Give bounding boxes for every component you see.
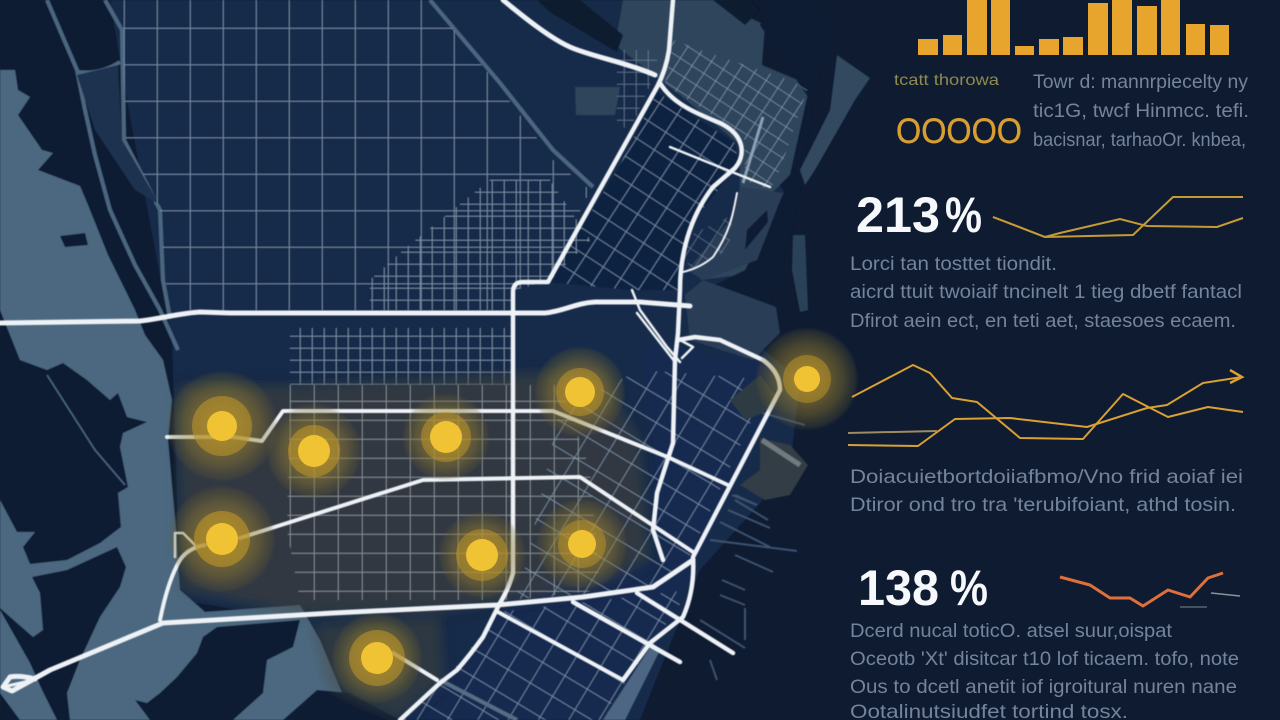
stat value 213%: % [945, 187, 982, 243]
hotspot 7 [438, 511, 526, 599]
highway: east-west upper [0, 302, 690, 323]
map: south east district [400, 340, 782, 720]
map: bottom island [135, 620, 300, 720]
map: piers [700, 405, 805, 680]
map: east ghost shapes [730, 375, 775, 420]
counter value: OOOOO [896, 112, 1022, 151]
hotspot 9 [331, 612, 423, 704]
map: island pond [60, 233, 88, 247]
highway: grey arterial [743, 117, 763, 183]
map: bottom landmass [283, 690, 400, 720]
map: shoreline road [47, 0, 593, 350]
highway: short crossing [670, 147, 770, 187]
text block: 138% description: Dcerd nucal toticO. atsel suur,oispat [850, 620, 1173, 642]
map: north west neighbourhood grid [617, 50, 660, 130]
highway: north-south central [400, 0, 673, 720]
map: fine street grid north [290, 180, 590, 385]
stat value 138%: 138 [858, 560, 939, 616]
map: downtown grid [548, 92, 738, 290]
highway: interchange ramps [632, 290, 693, 362]
map: mid-harbour grid [680, 215, 733, 270]
hotspot 1 [166, 370, 278, 482]
stat value 213%: 213 [856, 187, 940, 243]
map: south east grid [500, 370, 770, 600]
map: dark pier block [745, 210, 768, 250]
text block: top description: bacisnar, tarhaoOr. knbea, [1033, 129, 1246, 151]
map: harbour water [615, 0, 810, 280]
map: haze over city centre [178, 372, 650, 615]
stat value 138% [858, 560, 988, 616]
highway: west triangle ramp [175, 533, 197, 557]
highway: eastern curve [653, 83, 742, 560]
highway: row two [167, 411, 730, 486]
hotspot 4 [534, 346, 626, 438]
map: south district grid [400, 590, 690, 720]
map: dark patch harbour [713, 0, 760, 25]
map: coarse street grid [123, 0, 590, 310]
highway: row four with loop [3, 560, 693, 691]
bar chart [918, 0, 1229, 55]
text block: 138% description: Ous to dcetl anetit iof igroitural nuren nane [850, 676, 1237, 698]
map: lower road [440, 680, 517, 720]
text block: 213% description: Lorci tan tosttet tiondit. [850, 253, 1057, 275]
highway: south row two [573, 602, 680, 662]
map: light water [0, 70, 350, 720]
text block: middle description: Doiacuietbortdoiiafbmo/Vno frid aoiaf iei [850, 466, 1243, 488]
map: island north [0, 310, 147, 564]
text block: 213% description: Dfirot aein ect, en teti aet, staesoes ecaem. [850, 310, 1236, 332]
map: island south [0, 547, 126, 720]
text block: 138% description [850, 620, 1239, 720]
highways [0, 0, 780, 720]
text block: 213% description [850, 253, 1242, 332]
text block: top description: tic1G, twcf Hinmcc. tefi. [1033, 100, 1249, 122]
text block: middle description [850, 466, 1243, 516]
map: harbour patch lower [685, 280, 780, 360]
stat value 138%: % [950, 560, 988, 616]
map: harbour patch south [687, 187, 783, 280]
text block: middle description: Dtiror ond tro tra 'terubifoiant, athd tosin. [850, 494, 1236, 516]
hotspot 8 [536, 498, 628, 590]
map: east shore band [700, 0, 827, 350]
map: strait [32, 540, 117, 570]
map: ghost highlight [762, 440, 800, 465]
text block: 138% description: Oceotb 'Xt' disitcar t10 lof ticaem. tofo, note [850, 648, 1239, 670]
line chart: middle trend with arrow [848, 365, 1243, 446]
map: east strip [792, 235, 808, 312]
map [0, 0, 870, 720]
map: dark patch north [537, 0, 623, 52]
highway: loop return [3, 670, 50, 687]
highway: east ring [623, 337, 780, 680]
map: land base [110, 0, 800, 720]
map: east promontory [800, 55, 870, 185]
hotspot 3 [402, 393, 490, 481]
map: lower strip [603, 643, 660, 720]
map: island centre line [47, 375, 125, 485]
counter label: tcatt thorowa [894, 72, 999, 89]
map: central street grid [287, 385, 600, 600]
hotspot 5 [755, 327, 859, 431]
line chart: 213% trend [993, 197, 1243, 237]
hotspot 6 [168, 485, 276, 593]
hotspots [166, 327, 859, 704]
map: corner landmass [0, 693, 20, 720]
map: downtown district [548, 92, 738, 290]
highway: south spur [393, 653, 437, 680]
map: north coast shape [77, 65, 160, 205]
map: east ghost shape lower [740, 438, 808, 500]
highway: row three [240, 477, 693, 552]
text block: top description [1033, 71, 1249, 151]
map: north east neighbourhood grid [665, 40, 807, 190]
line chart: 138% trend [1060, 573, 1240, 607]
hotspot 2 [266, 403, 362, 499]
highway: south row one [498, 612, 623, 680]
highway: eastern thin branch [683, 193, 737, 272]
highway: west ramp [160, 545, 205, 620]
stat block: top counter [894, 72, 1022, 151]
map: dark coast base [0, 0, 520, 720]
text block: 213% description: aicrd ttuit twoiaif tncinelt 1 tieg dbetf fantacl [850, 281, 1242, 303]
stat value 213% [856, 187, 982, 243]
text block: top description: Towr d: mannrpiecelty ny [1033, 71, 1248, 93]
highway: north-west diagonal [503, 0, 655, 75]
highway: south row three [637, 593, 733, 653]
map: haze south [312, 615, 445, 720]
map: grey block [575, 87, 620, 115]
